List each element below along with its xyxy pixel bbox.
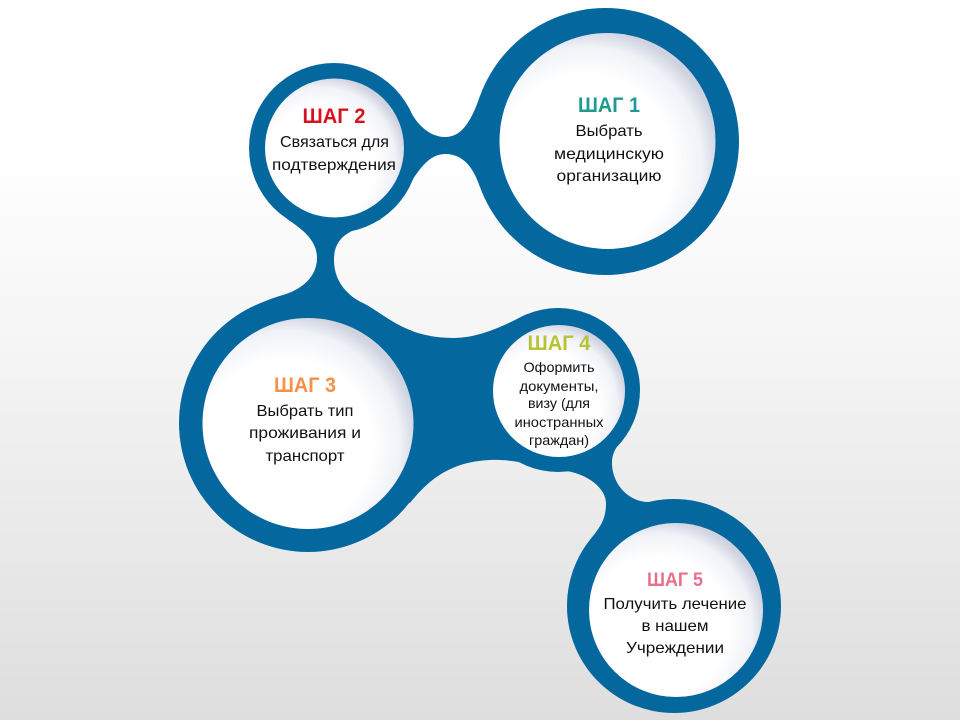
disc: step 4: [493, 325, 625, 457]
text: step 2 description: Связаться для: [280, 134, 389, 151]
text: step 2 description: [272, 134, 396, 174]
text: step 3 description: транспорт: [266, 448, 345, 465]
heading: step 3: ШАГ 3: [274, 374, 336, 397]
disc: step 3: [202, 318, 414, 529]
heading: step 5: ШАГ 5: [647, 570, 703, 591]
text: step 1 description: Выбрать: [576, 123, 642, 140]
text: step 5 description: Получить лечение: [604, 596, 747, 613]
heading: step 1: ШАГ 1: [578, 94, 640, 117]
text: step 1 description: [554, 123, 664, 185]
heading: step 2: ШАГ 2: [302, 105, 366, 128]
text: step 2 description: подтверждения: [272, 157, 396, 174]
heading: step 4: ШАГ 4: [528, 332, 591, 355]
text: step 3 description: [249, 403, 361, 465]
disc: step 5: [589, 523, 763, 697]
panel: step 2: [265, 78, 404, 218]
text: step 4 description: [514, 359, 604, 448]
text: step 3 description: проживания и: [249, 425, 361, 442]
text: step 5 description: Учреждении: [626, 640, 724, 657]
disc: step 1: [500, 33, 716, 249]
text: step 3 description: Выбрать тип: [256, 403, 354, 420]
text: step 4 description: документы,: [520, 378, 598, 394]
text: step 1 description: организацию: [556, 168, 662, 185]
connected blue circle network: [179, 8, 781, 713]
text: step 5 description: в нашем: [642, 618, 708, 635]
text: step 1 description: медицинскую: [554, 146, 664, 163]
text: step 4 description: визу (для: [528, 395, 590, 411]
text: step 4 description: иностранных: [514, 414, 604, 430]
text: step 5 description: [604, 596, 747, 657]
disc: step 2: [265, 78, 404, 218]
panel: step 4: [493, 325, 625, 457]
text: step 4 description: Оформить: [524, 359, 594, 375]
panel: step 3: [202, 318, 414, 529]
text: step 4 description: граждан): [529, 432, 589, 448]
panel: step 5: [589, 523, 763, 697]
panel: step 1: [500, 33, 716, 249]
